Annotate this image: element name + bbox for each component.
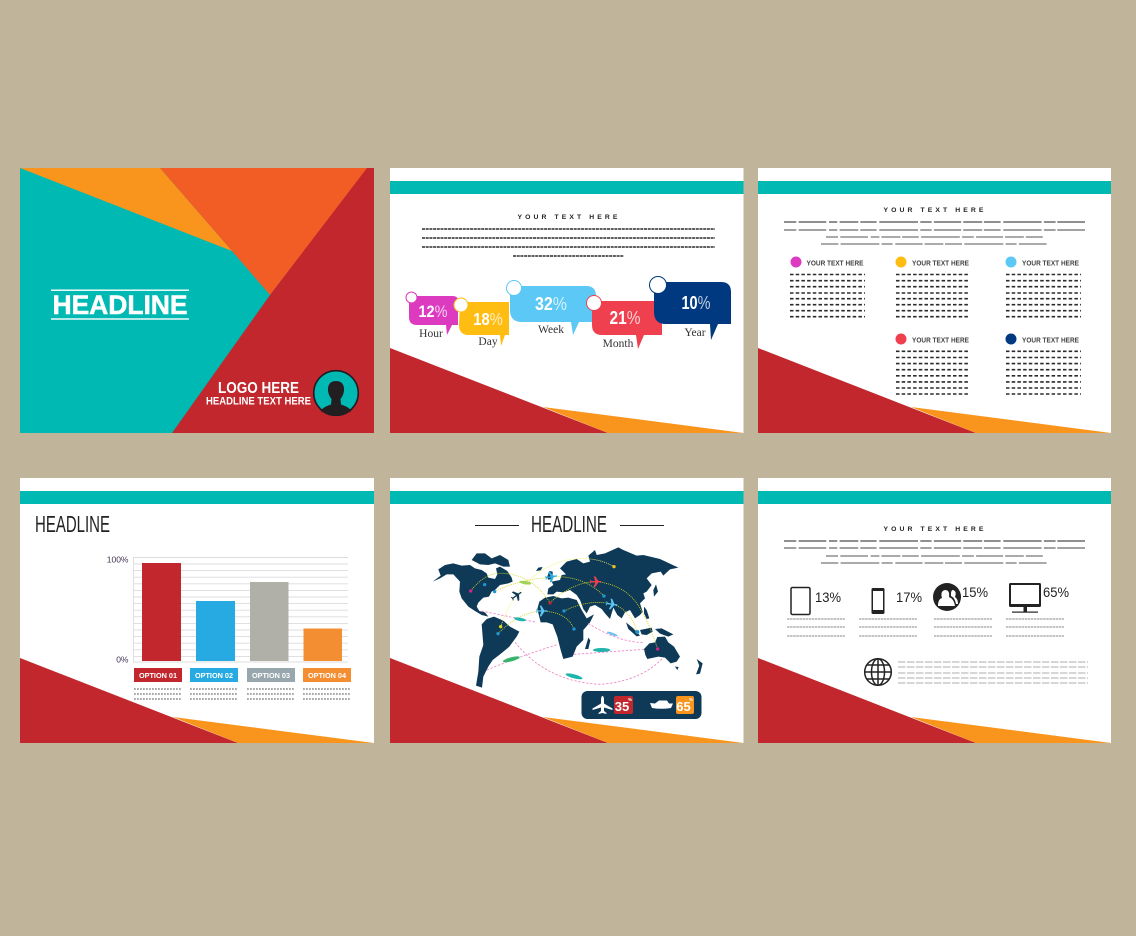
text block <box>422 229 715 256</box>
stat: tablet: 13% <box>815 589 841 605</box>
bubble: day: 18% <box>473 309 503 329</box>
legend panel <box>582 691 702 719</box>
topic: navy: YOUR TEXT HERE <box>1022 336 1079 344</box>
bubble: week <box>506 280 596 336</box>
logo text: LOGO HERE <box>218 380 299 397</box>
topic: magenta <box>790 256 865 317</box>
option labels: OPTION 01 <box>139 671 177 680</box>
logo text: HEADLINE TEXT HERE <box>206 396 311 408</box>
bubble: month: 21% <box>610 308 640 328</box>
option labels: OPTION 03 <box>252 671 290 680</box>
route markers <box>469 565 659 651</box>
north america <box>433 563 513 617</box>
heading: YOUR TEXT HERE <box>883 526 987 533</box>
icon: avatar <box>314 371 358 415</box>
option labels: OPTION 04 <box>308 671 347 680</box>
planes <box>509 571 619 616</box>
percent badge: 65: 65 <box>676 699 691 714</box>
bubble: year: Year <box>684 327 706 339</box>
panel: percent bubbles slide <box>390 168 744 433</box>
topic: sky blue <box>1006 256 1081 317</box>
flight routes <box>471 573 658 649</box>
bubble: week: 32% <box>535 293 567 314</box>
heading: YOUR TEXT HERE <box>883 207 987 214</box>
text block <box>784 222 1085 244</box>
stat: tablet <box>791 588 841 614</box>
south america <box>476 617 519 688</box>
headline: HEADLINE <box>35 511 110 537</box>
globe text block <box>898 662 1088 683</box>
bubble: month: Month <box>603 338 634 350</box>
bar chart: 100% <box>107 554 129 564</box>
stat: users: 15% <box>962 584 988 600</box>
heading: YOUR TEXT HERE <box>517 214 621 221</box>
percent badge: 35: 35 <box>615 699 629 714</box>
percent badge: 65 <box>676 696 694 714</box>
logo text <box>206 380 311 408</box>
stat: phone <box>872 588 922 614</box>
bubble: hour: Hour <box>419 328 443 340</box>
africa <box>537 596 594 659</box>
eurasia <box>547 547 678 619</box>
option labels: OPTION 02 <box>195 671 233 680</box>
stat text blocks <box>787 619 1064 636</box>
stat: monitor <box>1009 583 1069 613</box>
topic: coral: YOUR TEXT HERE <box>912 336 969 344</box>
text block <box>784 541 1085 563</box>
bubble: hour: 12% <box>418 302 448 321</box>
topic: navy <box>1006 334 1081 394</box>
option text blocks <box>134 689 351 699</box>
bubble: day: Day <box>478 336 498 348</box>
bubble: month <box>586 296 662 350</box>
option labels <box>134 668 351 682</box>
sea routes <box>482 611 663 684</box>
bubble: hour <box>406 292 458 340</box>
bubble: day <box>454 298 509 348</box>
percent badge: 35: % <box>628 697 632 702</box>
stat: monitor: 65% <box>1043 584 1069 600</box>
cover headline: HEADLINE <box>52 290 188 320</box>
australia <box>644 637 680 663</box>
world map <box>433 547 703 688</box>
stat: phone: 17% <box>896 589 922 605</box>
japan and islands <box>653 584 658 597</box>
bubble: week: Week <box>538 324 564 336</box>
panel: devices slide <box>758 478 1111 743</box>
bar chart <box>107 554 348 664</box>
ships <box>502 580 618 681</box>
bubble: year <box>650 276 731 340</box>
topic: magenta: YOUR TEXT HERE <box>806 258 864 268</box>
percent badge: 35 <box>614 696 633 714</box>
topic: yellow: YOUR TEXT HERE <box>912 258 969 268</box>
panel: cover slide <box>20 168 374 433</box>
topic: coral <box>896 334 970 394</box>
panel: bar chart slide <box>20 478 374 743</box>
icon: globe <box>865 659 891 685</box>
panel: five topics slide <box>758 168 1111 433</box>
topic: sky blue: YOUR TEXT HERE <box>1022 258 1079 268</box>
icon: plane <box>592 696 612 714</box>
percent badge: 65: % <box>689 697 693 702</box>
bubble: year: 10% <box>682 293 710 313</box>
headline: HEADLINE <box>531 511 607 537</box>
panel: world map slide <box>390 478 744 743</box>
topic: yellow <box>896 256 970 317</box>
icon: ship <box>650 700 673 709</box>
bar chart: 0% <box>116 654 129 664</box>
stat: users <box>933 583 988 611</box>
